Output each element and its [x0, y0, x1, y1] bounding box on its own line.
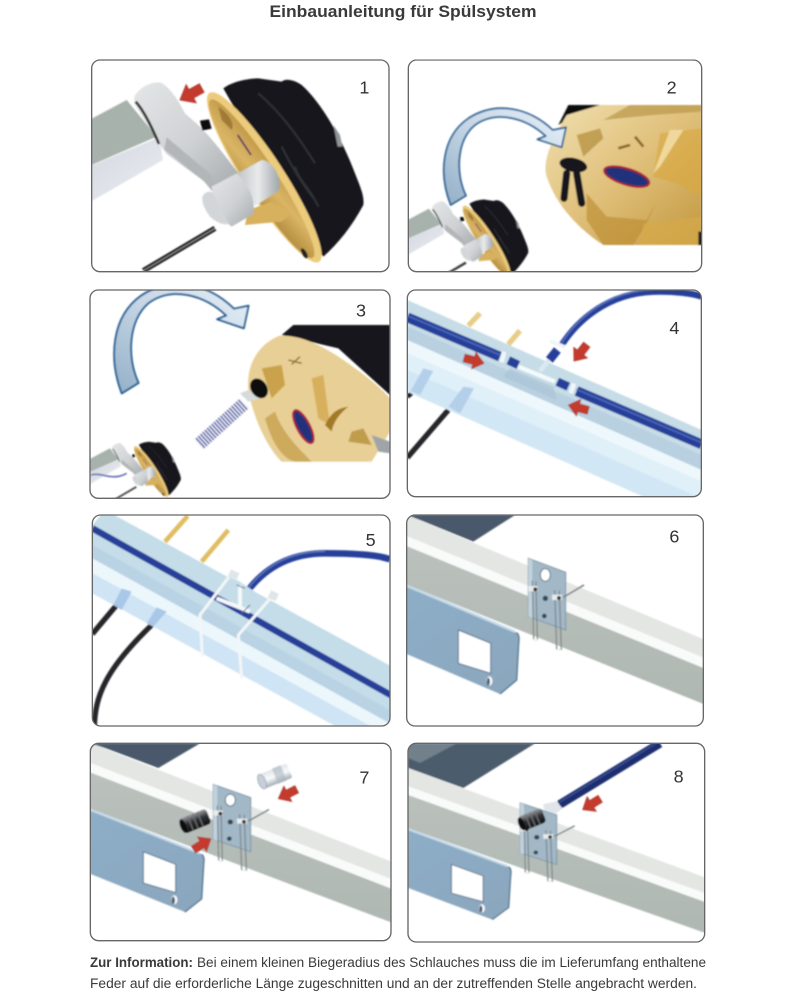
info note: Zur Information:: [90, 955, 193, 970]
panel border: [407, 515, 703, 726]
panel border: [92, 60, 389, 272]
info note: Feder auf die erforderliche Länge zugeschnitten und an der zutreffenden Stelle angebracht werden.: [90, 976, 697, 991]
illustration: rim with spring: [87, 284, 390, 500]
illustration: bracket on grey beam: [407, 516, 703, 704]
panel: step 8: [407, 742, 706, 943]
panel border: [408, 743, 705, 942]
step number 2: 2: [667, 78, 677, 98]
illustration: gold rim close-up: [397, 105, 702, 281]
illustration: hose connected to bracket: [408, 744, 704, 934]
step number 1: 1: [359, 78, 369, 98]
step number 8: 8: [674, 767, 684, 787]
panel: step 2: [397, 60, 702, 281]
panel border: [90, 743, 391, 941]
illustration: bracket with fitting and coupling: [91, 744, 390, 923]
illustration: hose fixed with cable ties: [93, 516, 390, 726]
panel: step 3: [87, 284, 390, 500]
step number 7: 7: [359, 767, 369, 787]
info note: [90, 955, 706, 991]
step number 3: 3: [356, 301, 366, 321]
panel border: [90, 290, 390, 498]
step number 6: 6: [669, 527, 679, 547]
panel border: [407, 290, 701, 497]
illustration: wheel on arm: [92, 77, 365, 271]
step number 4: 4: [669, 318, 679, 338]
panel: step 4: [406, 289, 702, 498]
info note: Bei einem kleinen Biegeradius des Schlauches muss die im Lieferumfang enthaltene: [197, 955, 706, 970]
panel border: [408, 60, 702, 272]
panel: step 7: [90, 742, 392, 942]
step number 5: 5: [366, 530, 376, 550]
panel: step 6: [406, 514, 704, 727]
panel: step 1: [91, 59, 390, 272]
panel: step 5: [92, 514, 391, 727]
panel border: [92, 515, 390, 726]
title: Einbauanleitung für Spülsystem: [270, 3, 536, 21]
illustration: blue hose on light beam: [408, 290, 701, 496]
